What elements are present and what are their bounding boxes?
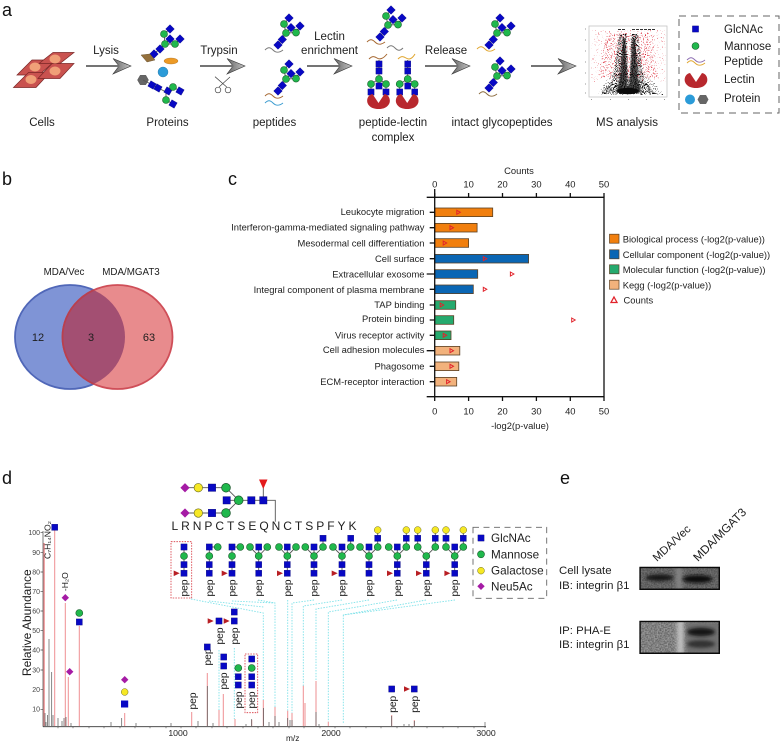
value 12: 12 (32, 332, 44, 344)
value 3: 3 (88, 332, 94, 344)
label: MDA/Vec lane: MDA/Vec (651, 523, 694, 564)
top axis labels: 30 (531, 178, 542, 190)
panel b: Venn diagram (2, 169, 172, 389)
glycan: parent structure (180, 480, 275, 522)
overlap (62, 290, 125, 384)
blot: cell lysate (639, 566, 720, 590)
x axis: 3000 (476, 728, 496, 738)
category labels: Cell adhesion molecules (323, 344, 425, 355)
peak annotations low m/z (42, 521, 128, 708)
bottom axis labels: 10 (463, 406, 474, 416)
connector lines (191, 599, 455, 724)
category labels: TAP binding (374, 299, 424, 310)
fragment structures row: pep (205, 579, 216, 596)
legend: workflow symbols: Peptide (724, 56, 763, 68)
peak annotations pep fragments: pep (234, 691, 245, 708)
label: release: Release (425, 45, 467, 57)
lectin complex 2 (396, 60, 419, 109)
top axis labels (432, 165, 609, 190)
legend: workflow symbols: Lectin (724, 74, 755, 86)
y axis: 40 (32, 648, 40, 654)
glycan: released top (485, 14, 515, 49)
y axis (20, 530, 43, 727)
peak annotations pep fragments (188, 609, 421, 713)
fragment structures row: pep (228, 579, 238, 596)
glycan: peptide bottom (274, 60, 304, 95)
icon: scissors (215, 77, 231, 93)
peptides: released strands (477, 47, 497, 96)
bottom axis labels: -log2(p-value) (491, 420, 549, 431)
label: cells: Cells (29, 117, 55, 129)
y axis: 10 (32, 706, 40, 714)
bottom axis labels: 40 (565, 406, 576, 416)
fragment structures row: pep (450, 579, 461, 596)
panel label c: c (228, 169, 237, 189)
label: lectin enrichment: Lectin (314, 31, 345, 43)
circle: MDA/Vec (15, 285, 125, 389)
top axis labels: 10 (463, 178, 474, 190)
y axis: 90 (32, 550, 40, 557)
panel c: enrichment bar chart (228, 165, 770, 431)
fragment structures row (171, 527, 467, 598)
peak annotations pep fragments: pep (203, 648, 214, 666)
counts markers (440, 210, 575, 384)
peptides: wavy strands (265, 48, 283, 105)
bottom axis labels: 30 (531, 406, 542, 416)
bottom axis labels: 20 (497, 406, 508, 416)
y axis: 100 (28, 530, 40, 537)
legend: categories: Cellular component (-log2(p-value)) (623, 249, 770, 260)
peak annotations pep fragments: pep (410, 695, 421, 713)
category labels: Interferon-gamma-mediated signaling pathway (231, 222, 425, 233)
fragment structures row: pep (180, 579, 190, 596)
peak annotations pep fragments: pep (219, 672, 230, 690)
legend: categories: Kegg (-log2(p-value)) (623, 280, 711, 290)
label: MS analysis: MS analysis (596, 117, 658, 129)
label: MDA/MGAT3: MDA/MGAT3 (102, 267, 160, 278)
fragment structures row: pep (393, 579, 404, 596)
category labels: Virus receptor activity (335, 330, 425, 340)
arrow: release (425, 58, 470, 74)
category labels: Cell surface (375, 253, 424, 264)
label: MDA/MGAT3 lane: MDA/MGAT3 (690, 505, 749, 564)
category labels: Protein binding (362, 313, 424, 324)
top axis labels: Counts (504, 165, 534, 176)
legend: glycan symbols: GlcNAc (491, 532, 531, 545)
legend: workflow symbols (679, 16, 779, 113)
peak annotations pep fragments: pep (188, 692, 199, 710)
legend: categories (610, 234, 770, 306)
category labels: Leukocyte migration (341, 206, 424, 217)
label: lectin enrichment: enrichment (301, 45, 359, 57)
bottom axis labels: 0 (432, 406, 437, 416)
label: peptide-lectin complex: complex (372, 132, 415, 144)
legend: workflow symbols: GlcNAc (724, 24, 763, 36)
arrow: trypsin (200, 58, 245, 74)
glycan: peptide top (274, 14, 304, 49)
legend: categories: Biological process (-log2(p-value)) (623, 234, 765, 244)
fragment structures row: pep (364, 579, 376, 596)
label: cell lysate blot: Cell lysate (559, 565, 612, 577)
panel e: western blots (559, 468, 749, 656)
y axis: 80 (32, 570, 40, 576)
legend: glycan symbols: Galactose (491, 565, 544, 578)
y axis: 70 (32, 589, 40, 596)
peak annotations pep fragments: pep (388, 695, 399, 713)
peak annotations low m/z: C₇H₁₄NO₂ (42, 521, 52, 559)
value 63: 63 (143, 332, 155, 344)
label: cell lysate blot: IB: integrin β1 (559, 580, 630, 592)
legend: glycan symbols: Mannose (491, 548, 539, 561)
peak annotations pep fragments: pep (230, 627, 241, 644)
fragment structures row: pep (283, 579, 294, 596)
label: peptide-lectin complex: peptide-lectin (359, 117, 427, 129)
fragment structures row: pep (422, 579, 433, 596)
fragment structures row: pep (310, 579, 320, 596)
peak annotations pep fragments: pep (215, 627, 226, 644)
x axis (43, 722, 496, 742)
y axis: 30 (32, 668, 40, 674)
fragment structures row: pep (254, 579, 265, 596)
spectrum peaks (44, 530, 414, 726)
category labels: Integral component of plasma membrane (254, 284, 424, 295)
label: IP blot: IP: PHA-E (559, 625, 611, 637)
category labels: Phagosome (374, 360, 424, 372)
legend: workflow symbols: Mannose (724, 41, 771, 53)
arrow: lysis (86, 58, 131, 74)
top axis labels: 20 (497, 178, 508, 190)
glycan: released bottom (485, 57, 515, 92)
bars (435, 208, 529, 386)
category labels: Extracellular exosome (332, 268, 424, 280)
label: proteins: Proteins (146, 117, 189, 129)
y axis: Relative Abundance (20, 569, 34, 676)
y axis: 50 (32, 628, 40, 635)
panel label d: d (2, 468, 12, 488)
top axis labels: 0 (432, 178, 437, 190)
glycan: unbound glycopeptide (376, 6, 406, 41)
label: MDA/Vec: MDA/Vec (44, 267, 85, 278)
circle: MDA/MGAT3 (62, 285, 172, 389)
icon: cells (14, 52, 74, 88)
icon: protein mixture (138, 25, 184, 108)
label: intact glycopeptides: intact glycopeptides (451, 117, 553, 129)
x axis: 2000 (321, 728, 341, 738)
panel label b: b (2, 169, 12, 189)
legend: categories: Molecular function (-log2(p-value)) (623, 264, 765, 275)
panel label a: a (2, 0, 13, 20)
label: IP blot: IB: integrin β1 (559, 639, 630, 651)
legend: workflow symbols: Protein (724, 93, 760, 105)
arrow: to MS (531, 58, 576, 74)
panel label e: e (560, 468, 570, 488)
category labels (231, 206, 425, 387)
label: peptides: peptides (253, 117, 296, 129)
peptide sequence: LRNPCTSEQNCTSPFYK (172, 519, 356, 533)
fragment structures row: pep (338, 579, 348, 596)
legend: glycan symbols: Neu5Ac (491, 580, 533, 593)
bottom axis labels: 50 (599, 406, 609, 416)
chart: volcano plot (585, 26, 667, 100)
blot: PHA-E IP (639, 620, 720, 654)
category labels: ECM-receptor interaction (320, 376, 424, 387)
label: lysis: Lysis (93, 45, 119, 57)
y axis: 60 (32, 608, 40, 616)
axes (427, 189, 604, 401)
legend: glycan symbols (473, 527, 547, 598)
arrow: lectin enrichment (307, 58, 352, 74)
peptides: enrichment strands (367, 40, 415, 59)
peak annotations low m/z: -H₂O (60, 572, 70, 591)
bottom axis labels (432, 406, 609, 431)
panel d: MS/MS spectrum (2, 468, 547, 742)
legend: categories: Counts (624, 294, 654, 306)
x axis: 1000 (168, 728, 188, 738)
label: trypsin: Trypsin (200, 45, 238, 57)
category labels: Mesodermal cell differentiation (298, 238, 424, 248)
y axis: 20 (32, 687, 40, 694)
top axis labels: 40 (565, 178, 576, 190)
top axis labels: 50 (599, 178, 609, 190)
lectin complex 1 (367, 60, 390, 109)
peak annotations pep fragments: pep (247, 691, 258, 708)
panel a: glycopeptide workflow (2, 0, 779, 144)
